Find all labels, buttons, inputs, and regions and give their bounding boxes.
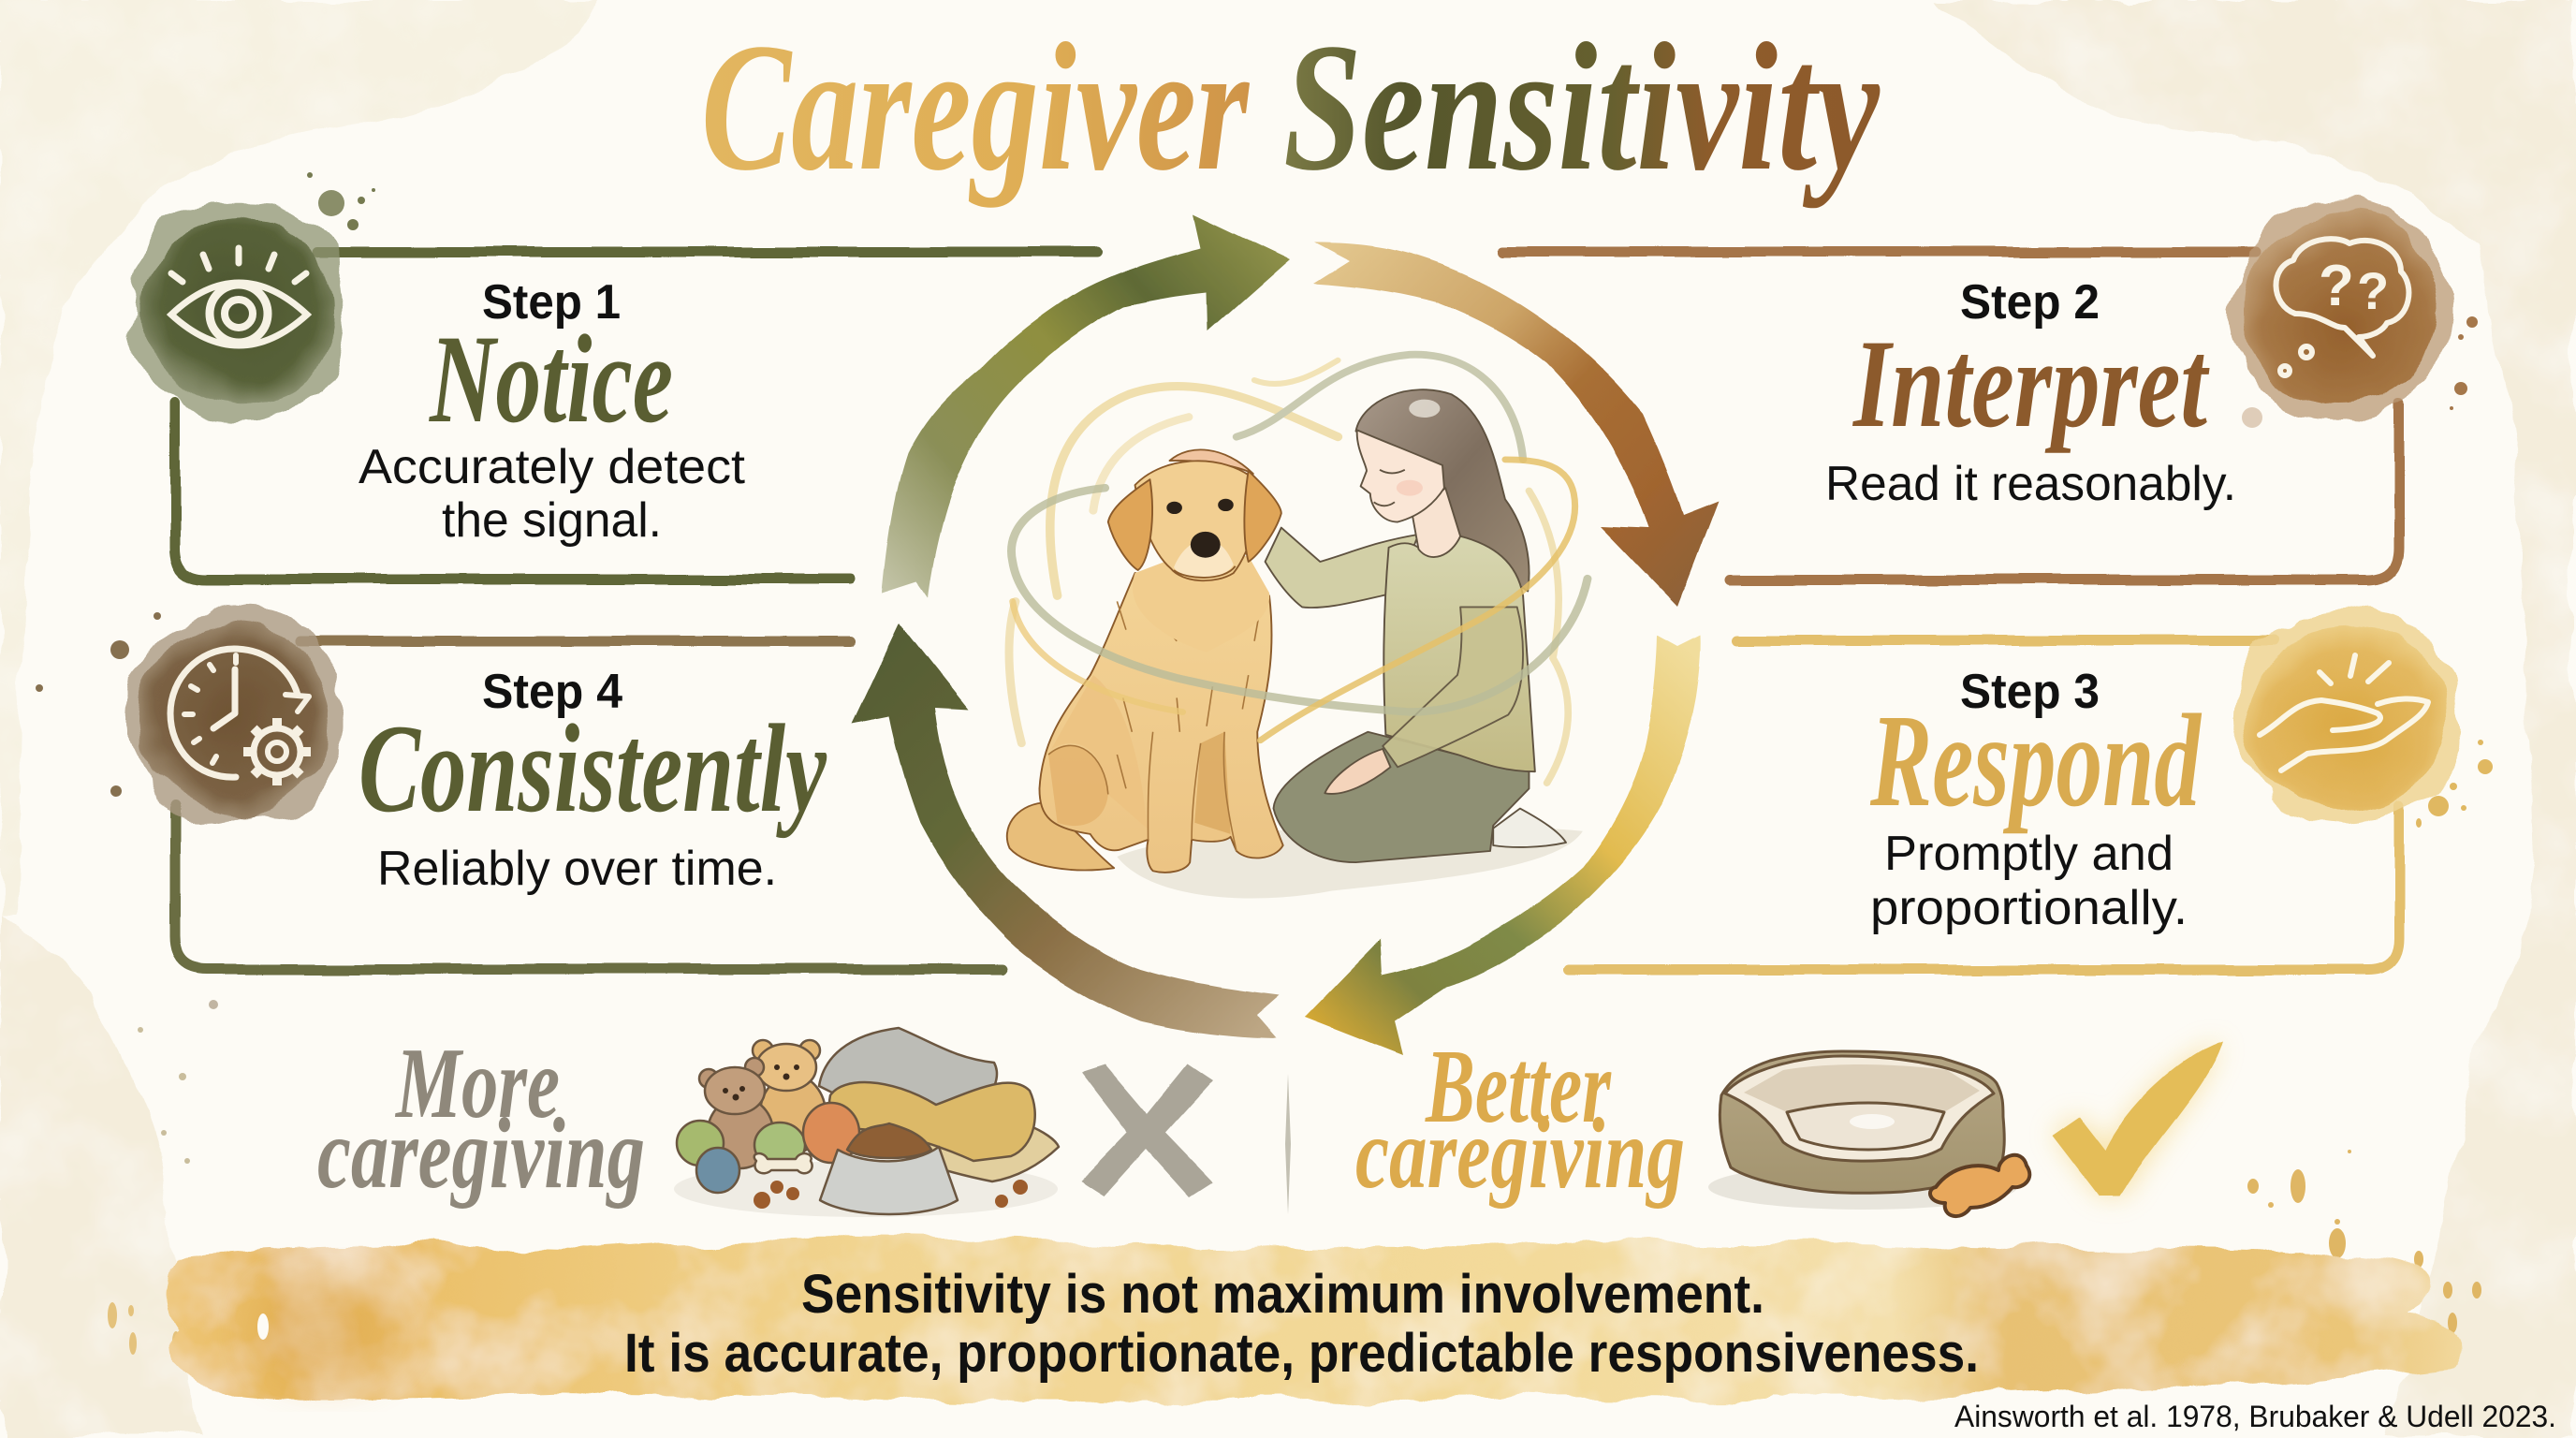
floor shadow [1117,825,1583,899]
panel outline: step 4 [300,637,850,646]
face details [1374,470,1405,506]
bone [754,1153,812,1173]
comparison label: Better [1425,1029,1612,1145]
banner text: It is accurate, proportionate, predictable responsiveness. [624,1323,1979,1384]
torso [1383,536,1535,771]
illustration: pile of toys, blankets, food [674,1028,1059,1217]
arrow: interpret to respond [1314,242,1719,607]
step label: Step 1 [482,275,621,330]
comparison: more caregiving [317,1028,1212,1217]
leg and fur lines [1048,601,1260,851]
illustration: treat [1930,1155,2029,1216]
cross mark [1081,1064,1212,1196]
extended arm [1266,528,1418,608]
icon: brain with question marks: ? [2319,254,2354,318]
banner: takeaway [166,1240,2456,1401]
kibble [754,1180,1028,1209]
food bowl [847,1123,931,1158]
background ribbons [1009,355,1568,783]
dog face [1166,499,1234,558]
balls [677,1121,724,1166]
face [1357,430,1444,522]
arrow: respond to consistently [1305,636,1701,1055]
step heading: Consistently [359,699,827,839]
hair [1356,389,1530,591]
step description: proportionally. [1870,881,2188,935]
body silhouette [1039,573,1283,873]
citation: Ainsworth et al. 1978, Brubaker & Udell 2023. [1954,1400,2556,1433]
ruff [1133,556,1269,653]
icon: clock and gear [124,609,344,826]
banner shading [253,1278,402,1381]
banner text: Sensitivity is not maximum involvement. [801,1264,1764,1325]
woman [1266,389,1566,862]
title: Caregiver [701,6,1250,209]
comparison label: caregiving [1355,1098,1685,1210]
panel: step 4 consistently [124,609,1002,969]
step description: the signal. [442,493,662,548]
arrow: notice to interpret [883,213,1290,597]
blankets [842,1105,1059,1181]
step description: Read it reasonably. [1825,457,2236,511]
panel outline: step 3 [1569,640,2399,970]
step label: Step 3 [1960,665,2100,719]
tail [1007,803,1114,870]
foreground ribbons [1011,460,1588,741]
check mark [2053,1042,2222,1196]
icon: eye [127,202,348,419]
panel outline: step 2 [1503,252,2399,580]
step description: Reliably over time. [377,842,777,896]
arrow: consistently to notice [852,623,1280,1038]
step description: Accurately detect [359,440,746,494]
panel: step 3 respond [1569,610,2460,970]
icon: brain with question marks [2228,200,2449,418]
divider [1285,1074,1291,1214]
panel outline: step 1 [175,252,1097,580]
muzzle [1174,539,1234,578]
step heading: Respond [1869,686,2202,834]
title: Sensitivity [1283,6,1881,209]
banner hole [257,1313,269,1340]
foot [1493,809,1566,847]
dog [1007,449,1283,873]
splatter dots [36,172,2493,1355]
icon: brain with question marks: ? [2357,261,2389,320]
head [1135,461,1257,580]
illustration: dog and woman with ribbons [1007,355,1588,899]
step heading: Interpret [1852,315,2210,454]
lower sleeve [1383,607,1523,767]
pants [1273,732,1529,862]
panel: step 2 interpret [1503,200,2449,580]
step label: Step 2 [1960,275,2100,330]
step label: Step 4 [482,665,622,719]
body shading [1048,675,1231,834]
cycle arrows [852,213,1719,1055]
teddy bears [760,1075,826,1153]
comparison label: More [395,1028,560,1139]
title [701,6,1881,209]
hand on head [1170,449,1253,474]
step heading: Notice [429,310,673,449]
ears [1108,479,1152,570]
step description: Promptly and [1884,827,2174,881]
illustration: dog bed [1708,1051,2017,1210]
neck [1412,488,1460,557]
comparison label: caregiving [317,1098,645,1210]
panel: step 1 notice [127,202,1097,580]
comparison: better caregiving [1355,1029,2222,1216]
icon: open hand [2232,610,2460,826]
hand on knee [1325,749,1391,794]
